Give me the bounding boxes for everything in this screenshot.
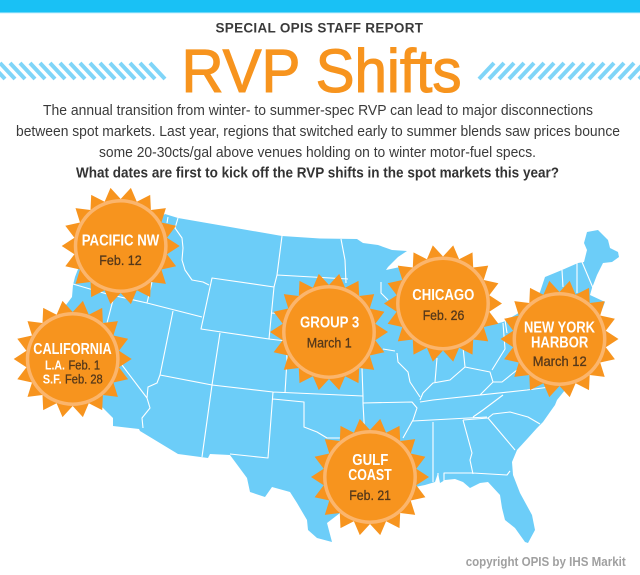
left hatch decoration — [0, 63, 165, 79]
intro text: some 20-30cts/gal above venues holding on to winter motor-fuel specs. — [99, 144, 536, 161]
sun: California: CALIFORNIA — [33, 341, 112, 358]
sun: New York Harbor — [500, 281, 618, 397]
report label: SPECIAL OPIS STAFF REPORT — [216, 20, 424, 36]
sun: Pacific NW — [62, 188, 180, 304]
sun: Chicago: Feb. 26 — [423, 307, 464, 323]
sun: Gulf Coast — [311, 419, 429, 535]
right hatch decoration — [479, 63, 640, 79]
copyright: copyright OPIS by IHS Markit — [466, 555, 626, 569]
sun: Pacific NW: Feb. 12 — [99, 252, 142, 268]
sun: Gulf Coast: GULF — [352, 452, 388, 469]
sun: New York Harbor: March 12 — [533, 353, 587, 369]
sun: California: Feb. 28 — [65, 373, 103, 387]
US map — [50, 212, 619, 543]
sun: California — [14, 301, 132, 417]
intro text: The annual transition from winter- to summer-spec RVP can lead to major disconnections — [43, 102, 593, 119]
sun: California: Feb. 1 — [68, 358, 100, 372]
state borders — [73, 217, 593, 482]
sun: Group 3: GROUP 3 — [300, 315, 360, 332]
top bar — [0, 0, 640, 14]
sun: New York Harbor: HARBOR — [531, 335, 588, 352]
intro text — [16, 102, 620, 161]
sun: Gulf Coast: Feb. 21 — [349, 487, 391, 503]
sun: Chicago — [384, 245, 502, 362]
sun: California: S.F. — [43, 373, 62, 387]
sun: Group 3 — [270, 274, 388, 390]
title: RVP Shifts — [182, 37, 462, 105]
sun: Chicago: CHICAGO — [412, 287, 474, 304]
sun: Group 3: March 1 — [307, 335, 352, 351]
sun: New York Harbor: NEW YORK — [524, 319, 596, 336]
question text: What dates are first to kick off the RVP shifts in the spot markets this year? — [76, 166, 559, 182]
sun: Pacific NW: PACIFIC NW — [82, 232, 160, 249]
map land outline — [50, 212, 619, 543]
sun: California: L.A. — [45, 358, 65, 372]
sun: Gulf Coast: COAST — [348, 467, 392, 484]
